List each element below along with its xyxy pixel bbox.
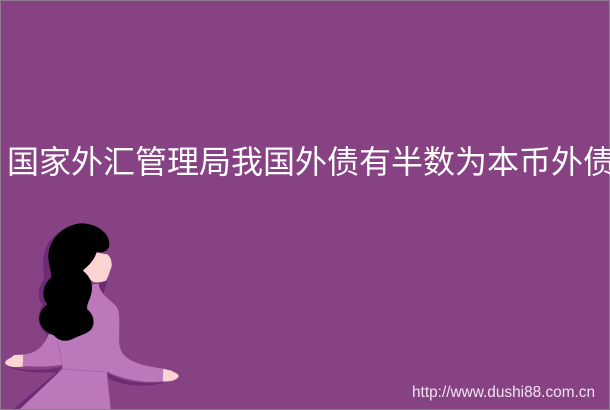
watermark url: http://www.dushi88.com.cn (412, 384, 595, 401)
hair (39, 223, 109, 341)
left hand (5, 355, 23, 367)
hair shadow (38, 227, 87, 353)
face (83, 253, 112, 282)
right hand (163, 369, 179, 381)
arm and dress shadows (6, 365, 170, 409)
title: 国家外汇管理局我国外债有半数为本币外债 (7, 144, 610, 180)
neck shadow (99, 281, 107, 295)
dress seams (57, 341, 105, 371)
dress and arms (20, 284, 163, 409)
